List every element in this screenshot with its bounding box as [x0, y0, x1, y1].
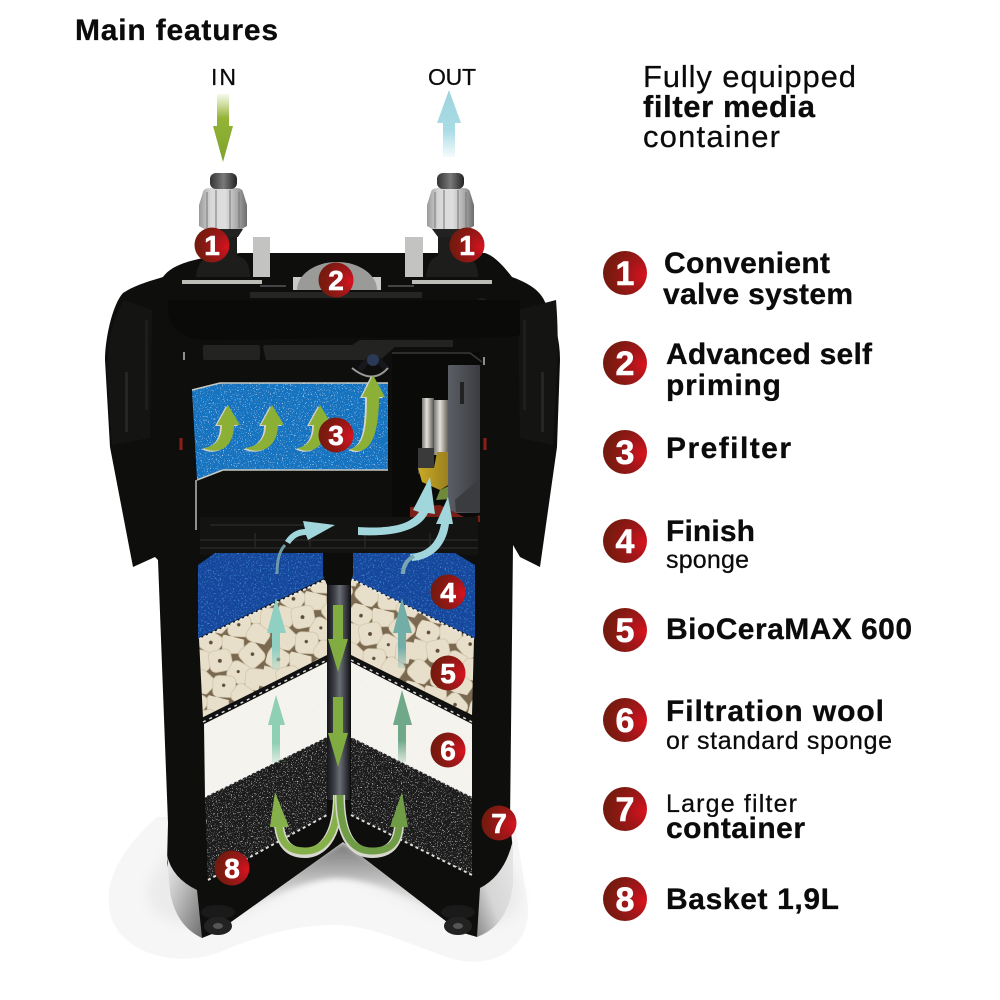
wheel: right — [441, 905, 475, 935]
label: out: OUT — [428, 64, 476, 90]
legend item 5: biocera max 600 — [603, 608, 912, 652]
legend item 4: finish sponge: sponge — [666, 546, 749, 574]
legend item 3: prefilter — [603, 430, 791, 474]
legend item 4: finish sponge — [603, 515, 755, 574]
prefilter sponge edge — [192, 383, 388, 480]
ceramic media: left — [199, 579, 327, 718]
legend item 1: convenient valve system — [603, 247, 853, 311]
diagram badge 5 — [430, 656, 466, 690]
silver foot: right — [477, 840, 513, 937]
legend item 6: filtration wool — [603, 695, 892, 755]
legend item 2: advanced self priming — [603, 338, 873, 402]
ceramic media: right — [351, 579, 474, 715]
legend item 3: prefilter: 3 — [616, 434, 634, 472]
legend item 7: large filter container: Large filter — [666, 790, 797, 818]
valve: right — [426, 173, 478, 277]
legend item 5: biocera max 600: 5 — [616, 612, 634, 650]
diagram badge 7: 7 — [491, 808, 507, 839]
arrow: water in — [213, 94, 233, 162]
diagram badge 2 — [318, 262, 354, 298]
prefilter blue sponge — [192, 383, 388, 480]
flow arrows: outlet blue — [277, 477, 453, 574]
clip: right — [405, 237, 423, 277]
legend item 2: advanced self priming: priming — [666, 369, 781, 402]
legend item 2: advanced self priming: Advanced self — [666, 338, 873, 371]
flow arrows: center pipe down — [328, 605, 348, 767]
legend item 3: prefilter: Prefilter — [666, 432, 791, 465]
flow arrows: prefilter — [201, 375, 385, 452]
diagram badge 7 — [482, 806, 516, 840]
text block: fully equipped filter media container: Fully equipped — [643, 59, 856, 94]
clip: left — [253, 237, 270, 277]
shelf ribs — [200, 517, 478, 555]
diagram badge 2: 2 — [328, 265, 344, 296]
diagram badge 8 — [214, 850, 250, 886]
diagram badge 3: 3 — [328, 420, 344, 451]
legend item 5: biocera max 600: BioCeraMAX 600 — [666, 613, 912, 646]
legend item 7: large filter container: container — [666, 812, 805, 845]
arrow: water out — [437, 90, 461, 157]
side panels — [107, 300, 558, 445]
lid top details — [168, 280, 520, 340]
prefilter chamber top — [203, 340, 453, 376]
label: in: IN — [211, 64, 236, 90]
heading: main features: Main features — [75, 14, 278, 47]
silver foot: left — [167, 855, 202, 938]
legend item 1: convenient valve system: valve system — [663, 278, 853, 311]
flow arrows: upward through media — [267, 598, 412, 763]
filtration wool: right — [351, 662, 472, 797]
flow arrows: u turn — [270, 792, 408, 853]
diagram badge 1 right — [450, 228, 484, 262]
legend item 1: convenient valve system: Convenient — [664, 247, 830, 280]
filter canister — [105, 173, 560, 938]
legend item 8: basket 1,9L: 8 — [616, 881, 634, 919]
diagram badge 4: 4 — [440, 577, 456, 608]
legend item 4: finish sponge: 4 — [616, 523, 635, 561]
diagram badge 5: 5 — [440, 658, 456, 689]
filtration wool: left — [204, 662, 327, 797]
diagram badge 1 left — [194, 228, 230, 262]
valve: left — [196, 173, 250, 277]
diagram badge 6 — [430, 732, 466, 768]
pump compartment — [392, 352, 482, 522]
diagram badge 3 — [318, 418, 354, 452]
diagram badge 1 left: 1 — [204, 230, 220, 261]
text block: fully equipped filter media container — [643, 59, 856, 154]
legend item 4: finish sponge: Finish — [666, 515, 755, 548]
legend item 6: filtration wool: 6 — [616, 702, 634, 740]
wheel: left — [201, 905, 235, 935]
legend item 8: basket 1,9L: Basket 1,9L — [666, 883, 839, 916]
legend item 7: large filter container: 7 — [616, 791, 634, 829]
diagram badge 1 right: 1 — [459, 230, 475, 261]
finish sponge: right — [351, 553, 475, 638]
text block: fully equipped filter media container: container — [643, 119, 780, 154]
legend item 2: advanced self priming: 2 — [616, 345, 634, 383]
legend item 1: convenient valve system: 1 — [616, 255, 634, 293]
text block: fully equipped filter media container: filter media — [643, 89, 816, 124]
legend item 7: large filter container — [603, 787, 805, 845]
diagram badge 6: 6 — [440, 735, 456, 766]
diagram badge 4 — [430, 574, 466, 610]
chamber side walls — [181, 352, 485, 530]
canister body — [105, 253, 560, 938]
legend item 6: filtration wool: or standard sponge — [666, 727, 892, 755]
floor shadow — [109, 815, 528, 962]
black basket media: right — [351, 737, 472, 875]
legend item 8: basket 1,9L — [603, 877, 839, 921]
black basket media: left — [205, 737, 327, 880]
center pipe — [323, 553, 353, 800]
finish sponge: left — [198, 553, 325, 638]
layer separators — [199, 579, 474, 880]
self priming button — [293, 262, 381, 290]
legend item 6: filtration wool: Filtration wool — [666, 695, 884, 728]
diagram badge 8: 8 — [224, 853, 240, 884]
